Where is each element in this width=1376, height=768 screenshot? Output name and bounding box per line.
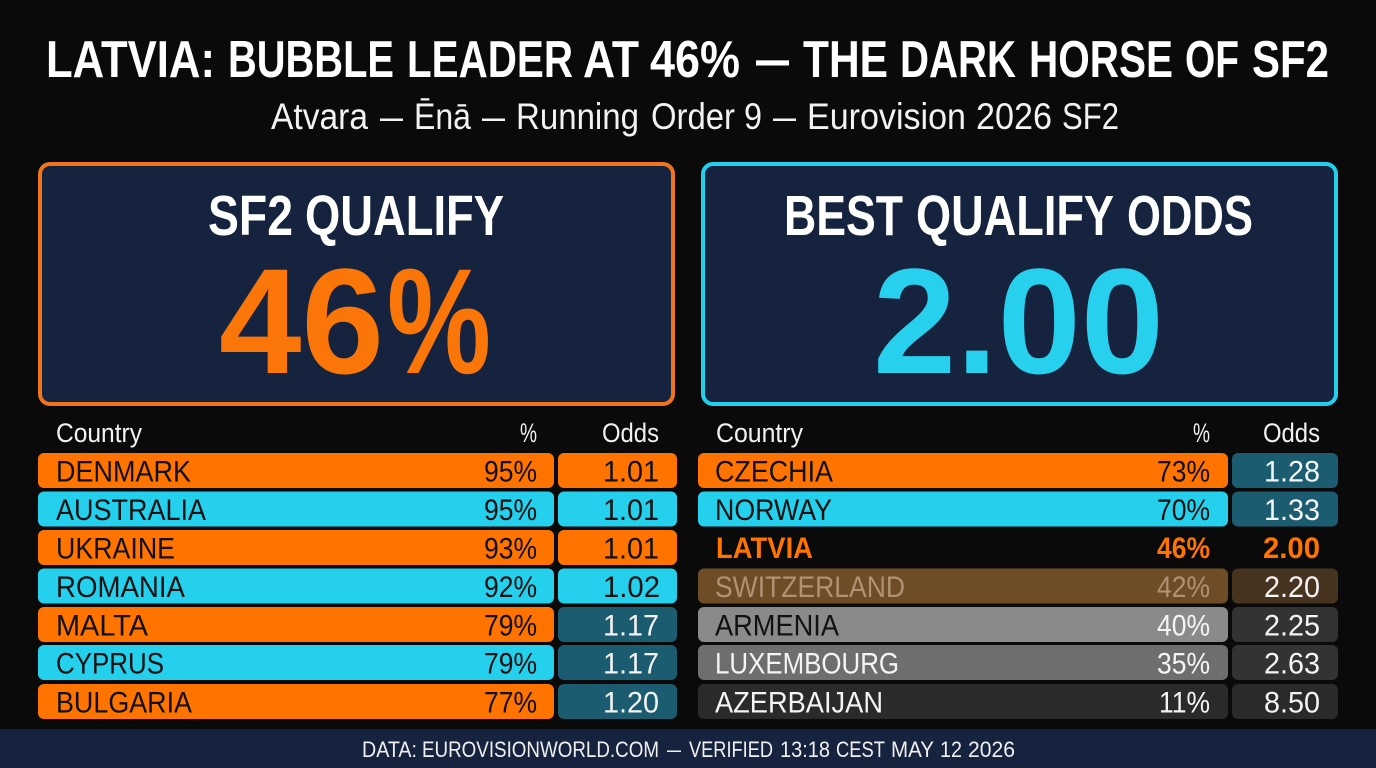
left table header: Odds bbox=[602, 418, 659, 448]
right table header: Country bbox=[716, 418, 803, 448]
row: Switzerland: 42% bbox=[1157, 571, 1210, 604]
subtitle: 2026 bbox=[976, 96, 1052, 137]
row: Czechia: CZECHIA bbox=[715, 456, 833, 488]
row: Bulgaria: 77% bbox=[484, 686, 537, 720]
row: Denmark bbox=[38, 453, 677, 488]
panel heading: SF2 qualify: QUALIFY bbox=[305, 184, 504, 248]
title: THE bbox=[803, 31, 888, 89]
left table header: % bbox=[520, 418, 537, 448]
row: Malta: MALTA bbox=[56, 610, 148, 642]
title: 46% bbox=[650, 31, 740, 89]
row: Switzerland: SWITZERLAND bbox=[715, 571, 905, 604]
row: Cyprus bbox=[38, 645, 677, 680]
row: Australia: 95% bbox=[484, 494, 537, 527]
footer source bar: 2026 bbox=[968, 737, 1015, 762]
row: Ukraine: UKRAINE bbox=[56, 532, 175, 566]
row: Luxembourg: LUXEMBOURG bbox=[715, 648, 899, 680]
row: Latvia highlighted: LATVIA bbox=[716, 532, 813, 565]
footer source bar: EUROVISIONWORLD.COM bbox=[422, 737, 659, 762]
panel heading: best qualify odds: ODDS bbox=[1127, 184, 1253, 248]
title bbox=[46, 31, 1329, 89]
title: SF2 bbox=[1252, 31, 1329, 89]
row: Romania: 92% bbox=[484, 571, 537, 604]
title: LEADER bbox=[407, 31, 573, 89]
row: Cyprus: 79% bbox=[484, 648, 537, 680]
row: Denmark: DENMARK bbox=[56, 456, 191, 488]
subtitle: Ēnā bbox=[414, 96, 471, 137]
subtitle: — bbox=[773, 96, 796, 137]
title: BUBBLE bbox=[228, 31, 394, 89]
subtitle: Eurovision bbox=[807, 96, 966, 137]
panel: SF2 qualify bbox=[40, 164, 673, 405]
row: Latvia highlighted: 46% bbox=[1157, 532, 1210, 565]
footer source bar: DATA: bbox=[362, 737, 417, 762]
row: Malta bbox=[38, 607, 677, 642]
subtitle: Atvara bbox=[271, 96, 368, 137]
row: Romania: ROMANIA bbox=[56, 571, 185, 604]
row: Luxembourg bbox=[698, 645, 1338, 680]
row: Czechia: 1.28 bbox=[1264, 456, 1320, 488]
row: Norway: NORWAY bbox=[715, 494, 832, 527]
row: Azerbaijan bbox=[698, 684, 1338, 720]
subtitle: — bbox=[482, 96, 505, 137]
row: Latvia highlighted bbox=[716, 532, 1320, 565]
row: Romania: 1.02 bbox=[603, 571, 660, 604]
row: Australia: 1.01 bbox=[603, 494, 659, 527]
title: LATVIA: bbox=[46, 31, 215, 89]
right table header: % bbox=[1193, 418, 1210, 448]
panel heading: best qualify odds: QUALIFY bbox=[916, 184, 1114, 248]
row: Azerbaijan: AZERBAIJAN bbox=[715, 686, 883, 720]
row: Armenia: 2.25 bbox=[1264, 610, 1320, 642]
row: Ukraine bbox=[38, 530, 677, 566]
title: AT bbox=[583, 31, 639, 89]
row: Bulgaria: BULGARIA bbox=[56, 686, 192, 720]
footer source bar: VERIFIED bbox=[689, 737, 773, 762]
row: Norway bbox=[698, 492, 1338, 527]
row: Australia bbox=[38, 492, 677, 527]
left table header bbox=[56, 418, 659, 448]
row: Denmark: 95% bbox=[484, 456, 537, 488]
row: Cyprus: CYPRUS bbox=[56, 648, 164, 680]
subtitle: Order bbox=[651, 96, 735, 137]
panel: best qualify odds bbox=[703, 164, 1336, 405]
row: Ukraine: 93% bbox=[484, 532, 537, 566]
subtitle: — bbox=[380, 96, 403, 137]
row: Australia: AUSTRALIA bbox=[56, 494, 206, 527]
row: Romania bbox=[38, 568, 677, 604]
panel heading: best qualify odds: BEST bbox=[784, 184, 903, 248]
left table header: Country bbox=[56, 418, 142, 448]
row: Cyprus: 1.17 bbox=[603, 648, 659, 680]
row: Malta: 1.17 bbox=[603, 610, 659, 642]
panel heading: SF2 qualify bbox=[208, 184, 504, 248]
left table bbox=[38, 418, 677, 720]
subtitle: Running bbox=[516, 96, 639, 137]
row: Czechia bbox=[698, 453, 1338, 488]
row: Bulgaria bbox=[38, 684, 677, 720]
right table bbox=[698, 418, 1338, 720]
subtitle bbox=[271, 96, 1119, 137]
row: Switzerland bbox=[698, 568, 1338, 604]
big number: 46%: 46 bbox=[219, 237, 384, 405]
right table header: Odds bbox=[1263, 418, 1320, 448]
title: HORSE bbox=[1029, 31, 1173, 89]
footer source bar: — bbox=[667, 737, 681, 762]
row: Switzerland: 2.20 bbox=[1264, 571, 1320, 604]
big number: 46%: % bbox=[387, 237, 491, 405]
panel heading: SF2 qualify: SF2 bbox=[208, 184, 293, 248]
subtitle: SF2 bbox=[1062, 96, 1119, 137]
row: Armenia bbox=[698, 607, 1338, 642]
footer source bar bbox=[0, 729, 1376, 768]
footer source bar: 12 bbox=[940, 737, 962, 762]
row: Norway: 70% bbox=[1157, 494, 1210, 527]
big number: 46% bbox=[219, 237, 491, 405]
footer source bar: MAY bbox=[891, 737, 934, 762]
row: Armenia: ARMENIA bbox=[715, 610, 839, 642]
title: — bbox=[756, 31, 789, 89]
row: Denmark: 1.01 bbox=[603, 456, 659, 488]
big number: 2.00: 2.00 bbox=[873, 237, 1164, 405]
row: Ukraine: 1.01 bbox=[603, 532, 659, 566]
row: Luxembourg: 2.63 bbox=[1264, 648, 1320, 680]
right table header bbox=[716, 418, 1320, 448]
row: Czechia: 73% bbox=[1157, 456, 1210, 488]
panel heading: best qualify odds bbox=[784, 184, 1253, 248]
row: Bulgaria: 1.20 bbox=[603, 686, 659, 720]
row: Norway: 1.33 bbox=[1264, 494, 1320, 527]
title: DARK bbox=[900, 31, 1016, 89]
footer source bar: CEST bbox=[836, 737, 885, 762]
row: Luxembourg: 35% bbox=[1157, 648, 1210, 680]
row: Armenia: 40% bbox=[1157, 610, 1210, 642]
row: Latvia highlighted: 2.00 bbox=[1263, 532, 1320, 565]
row: Azerbaijan: 8.50 bbox=[1264, 686, 1320, 720]
subtitle: 9 bbox=[744, 96, 762, 137]
title: OF bbox=[1185, 31, 1239, 89]
footer source bar: 13:18 bbox=[780, 737, 830, 762]
row: Azerbaijan: 11% bbox=[1159, 686, 1210, 720]
row: Malta: 79% bbox=[484, 610, 537, 642]
